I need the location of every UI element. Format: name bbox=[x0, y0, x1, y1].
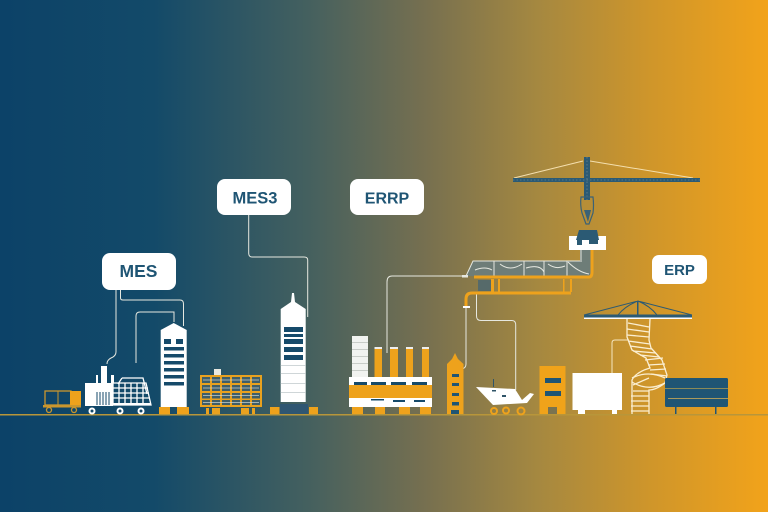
icon: white wheelbarrow bbox=[476, 379, 534, 414]
icon: factory with chimneys bbox=[349, 336, 432, 414]
icon: white block bbox=[572, 373, 622, 414]
icon: tower two bbox=[270, 293, 318, 414]
connector lines bbox=[107, 215, 629, 390]
label: ERRP: ERRP bbox=[365, 190, 410, 208]
label: ERP bbox=[652, 255, 707, 284]
icon: tower crane bbox=[513, 157, 700, 250]
icon: spiral staircase bbox=[627, 319, 667, 414]
icon: orange cart bbox=[43, 391, 81, 412]
icon: orange grid building bbox=[200, 369, 262, 414]
icon: roof canopy bbox=[584, 301, 692, 319]
icon: small orange tower bbox=[447, 353, 464, 414]
icon: white machine with cart bbox=[85, 366, 151, 414]
icon: orange building bbox=[540, 366, 566, 414]
label: ERP: ERP bbox=[664, 262, 695, 279]
elevated conveyor with pipes bbox=[462, 250, 592, 308]
icon: tower one bbox=[159, 323, 189, 414]
label: ERRP bbox=[350, 179, 424, 215]
label: MES3 bbox=[217, 179, 291, 215]
label: MES3: MES3 bbox=[233, 190, 277, 208]
icon: dark bench bbox=[665, 378, 728, 414]
ground line bbox=[0, 414, 768, 416]
label: MES: MES bbox=[120, 261, 157, 281]
label: MES bbox=[102, 253, 176, 290]
